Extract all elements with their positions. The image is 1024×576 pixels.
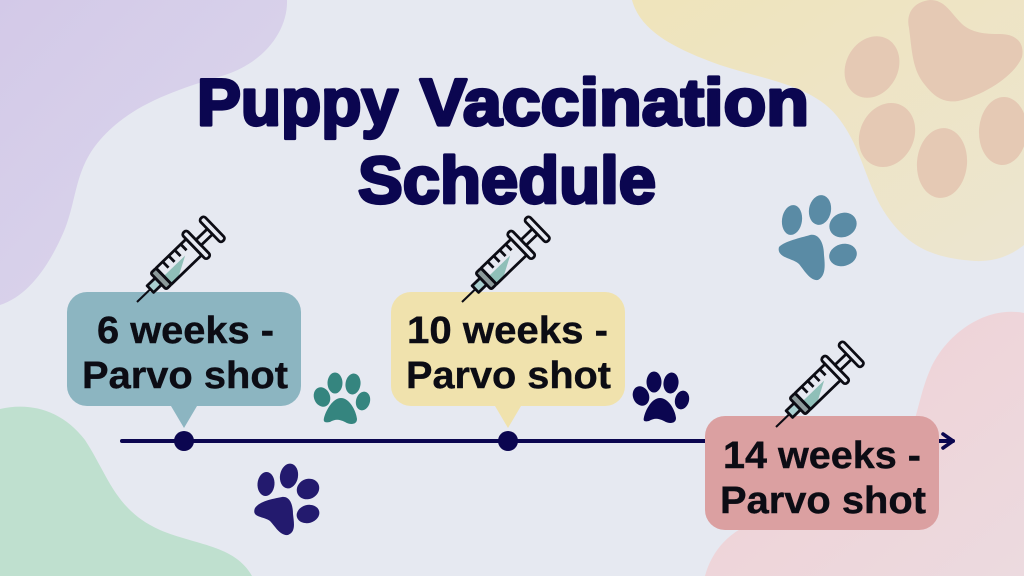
icon: syringe 1 [125,214,227,315]
timeline arrow [122,434,953,448]
title [197,65,809,217]
callout: 6 weeks: Parvo shot [82,355,288,397]
title: Vaccination [420,65,809,139]
pink corner blob [705,312,1024,576]
title: Puppy [197,65,398,139]
green corner blob [0,407,252,576]
timeline dot: 6 weeks [174,431,194,451]
callout: 10 weeks: Parvo shot [406,355,611,397]
callout: 14 weeks: Parvo shot [720,480,926,522]
icon: syringe 3 [764,339,866,440]
icon: teal paw [311,372,372,424]
callout: 14 weeks: 14 weeks - [723,435,921,477]
callout: 10 weeks: 10 weeks - [407,310,608,352]
timeline dot: 10 weeks [498,431,518,451]
callout: 14 weeks [705,416,939,530]
callout: 6 weeks: 6 weeks - [97,310,274,352]
icon: syringe 2 [450,214,552,315]
icon: navy paw large [254,462,323,535]
icon: blue paw [779,193,861,280]
callout: 10 weeks [391,292,625,428]
purple corner blob [0,0,287,305]
icon: navy paw right [630,372,691,423]
title: Schedule [358,143,656,217]
callout: 6 weeks [67,292,301,428]
large faint paw [834,0,1024,200]
yellow corner blob [632,0,1024,261]
